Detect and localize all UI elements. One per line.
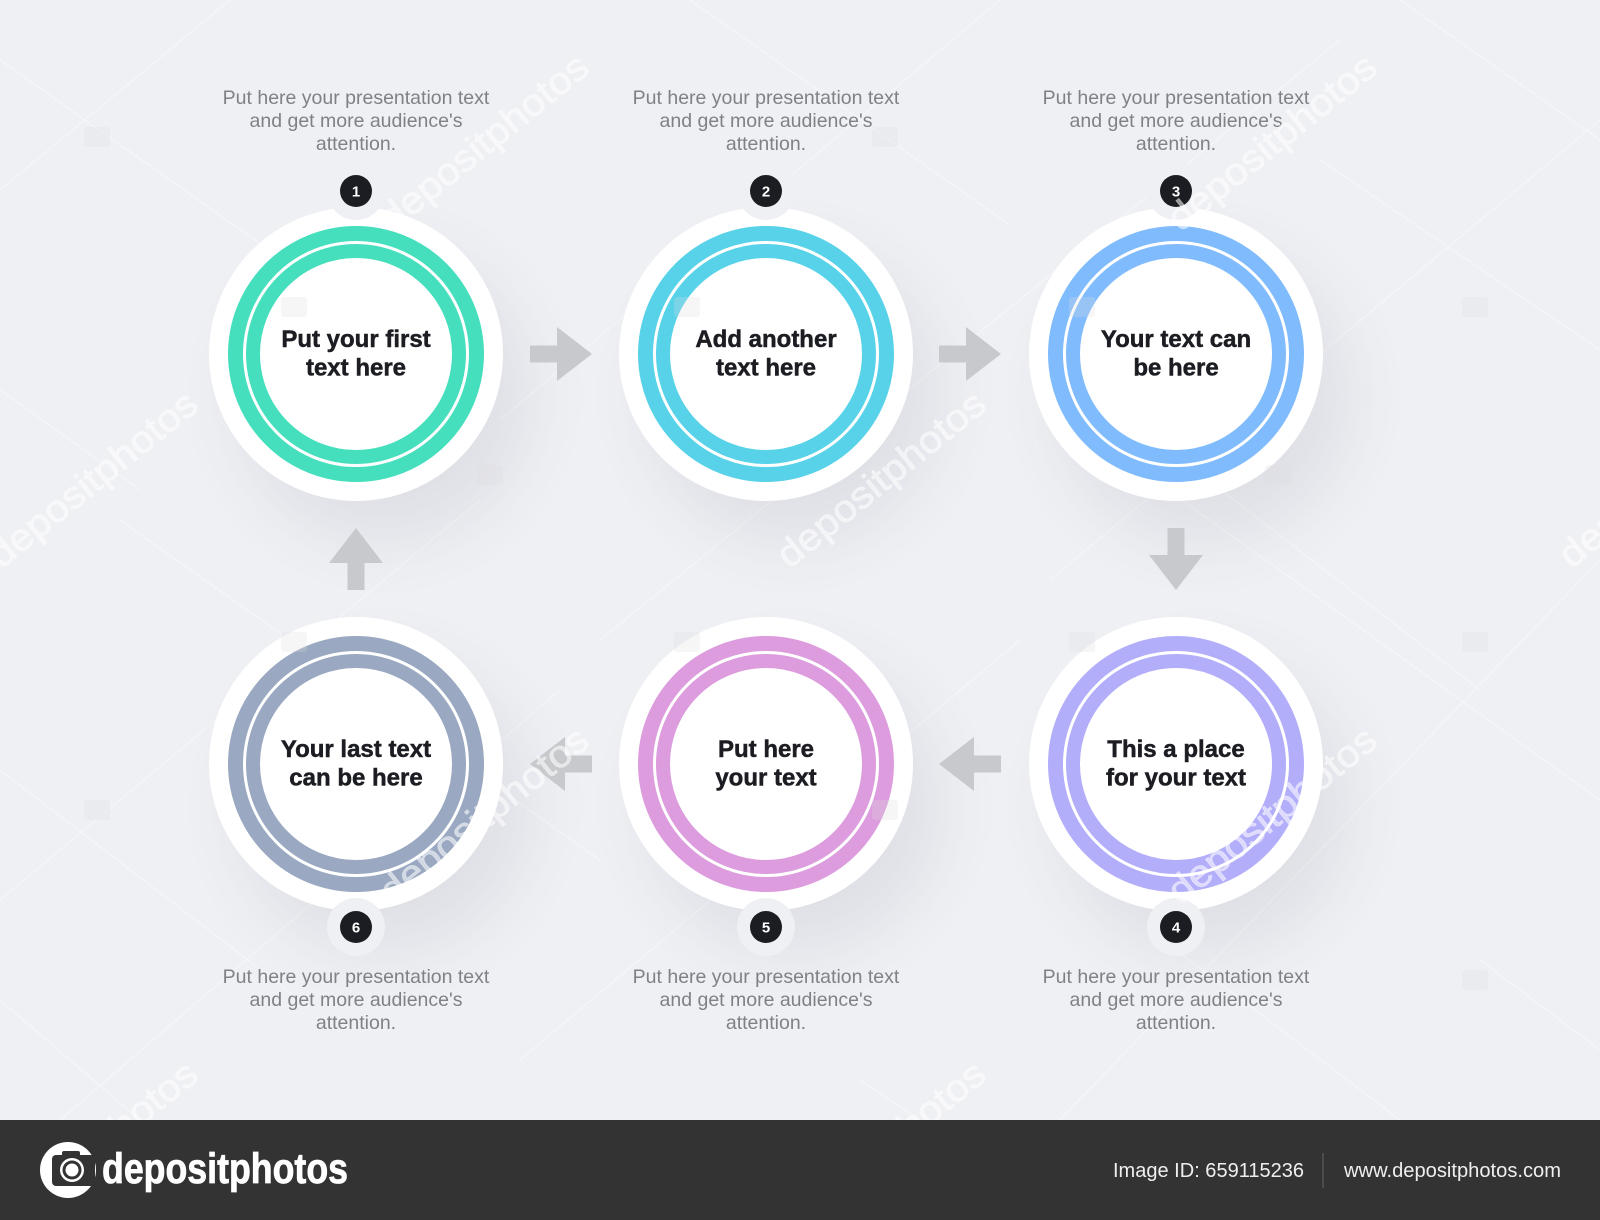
step 4 description: and get more audience's bbox=[1070, 989, 1283, 1011]
watermark: depositphotos bbox=[372, 46, 597, 240]
arrow: step 4 to 5 bbox=[939, 737, 1001, 791]
step 2 heading: text here bbox=[716, 354, 816, 382]
step 3 description: and get more audience's bbox=[1070, 110, 1283, 132]
step 2 ring bbox=[646, 234, 886, 474]
step 6 heading: Your last text bbox=[281, 736, 431, 763]
watermark: depositphotos bbox=[1160, 46, 1385, 240]
step 4 ring bbox=[1056, 644, 1296, 884]
step 2 heading: Add another bbox=[695, 326, 837, 353]
step 6 badge: 6 bbox=[352, 920, 360, 936]
step 1 panel bbox=[209, 87, 503, 501]
step 4 heading: This a place bbox=[1107, 736, 1245, 763]
step 1 ring bbox=[236, 234, 476, 474]
step 4 panel bbox=[1029, 617, 1323, 1034]
watermark: depositphotos bbox=[372, 719, 597, 913]
step 2 description: attention. bbox=[726, 133, 806, 155]
step 6 heading: can be here bbox=[289, 764, 423, 792]
step 3 ring bbox=[1056, 234, 1296, 474]
step 2 badge bbox=[750, 175, 782, 207]
watermark: depositphotos bbox=[1160, 719, 1385, 913]
step 3 badge: 3 bbox=[1172, 184, 1180, 200]
step 2 badge: 2 bbox=[762, 184, 770, 200]
step 6 badge bbox=[340, 911, 372, 943]
step 6 panel bbox=[209, 617, 503, 1034]
footer logo icon bbox=[40, 1142, 96, 1198]
step 1 heading: Put your first bbox=[281, 326, 431, 353]
step 3 badge bbox=[1160, 175, 1192, 207]
step 6 description: Put here your presentation text bbox=[223, 966, 490, 988]
step 1 description: Put here your presentation text bbox=[223, 87, 490, 109]
watermark: depositphotos bbox=[769, 383, 994, 577]
step 3 description: Put here your presentation text bbox=[1043, 87, 1310, 109]
step 5 description: and get more audience's bbox=[660, 989, 873, 1011]
step 5 heading: your text bbox=[715, 764, 817, 792]
step 2 description: Put here your presentation text bbox=[633, 87, 900, 109]
step 5 ring bbox=[646, 644, 886, 884]
step 5 description: attention. bbox=[726, 1012, 806, 1034]
step 3 panel bbox=[1029, 87, 1323, 501]
step 1 badge bbox=[340, 175, 372, 207]
footer logo wordmark: depositphotos bbox=[102, 1145, 348, 1193]
step 4 badge: 4 bbox=[1172, 920, 1181, 936]
step 2 description: and get more audience's bbox=[660, 110, 873, 132]
step 1 description: and get more audience's bbox=[250, 110, 463, 132]
step 3 heading: be here bbox=[1133, 354, 1219, 382]
footer bar bbox=[0, 1120, 1600, 1220]
step 5 description: Put here your presentation text bbox=[633, 966, 900, 988]
step 6 description: and get more audience's bbox=[250, 989, 463, 1011]
image id: Image ID: 659115236 bbox=[1113, 1160, 1304, 1182]
arrow: step 1 to 2 bbox=[530, 327, 592, 381]
step 1 heading: text here bbox=[306, 354, 406, 382]
arrow: step 5 to 6 bbox=[530, 737, 592, 791]
step 4 heading: for your text bbox=[1106, 764, 1246, 792]
step 4 description: attention. bbox=[1136, 1012, 1216, 1034]
step 1 description: attention. bbox=[316, 133, 396, 155]
arrow: step 2 to 3 bbox=[939, 327, 1001, 381]
step 5 panel bbox=[619, 617, 913, 1034]
arrow: step 6 to 1 bbox=[329, 528, 383, 590]
step 3 heading: Your text can bbox=[1101, 326, 1251, 353]
step 4 description: Put here your presentation text bbox=[1043, 966, 1310, 988]
website url: www.depositphotos.com bbox=[1343, 1160, 1561, 1182]
step 5 heading: Put here bbox=[718, 736, 814, 763]
step 3 description: attention. bbox=[1136, 133, 1216, 155]
step 5 badge bbox=[750, 911, 782, 943]
step 1 badge: 1 bbox=[352, 184, 360, 200]
step 5 badge: 5 bbox=[762, 920, 770, 936]
step 4 badge bbox=[1160, 911, 1192, 943]
step 2 panel bbox=[619, 87, 913, 501]
arrow: step 3 to 4 bbox=[1149, 528, 1203, 590]
step 6 ring bbox=[236, 644, 476, 884]
step 6 description: attention. bbox=[316, 1012, 396, 1034]
